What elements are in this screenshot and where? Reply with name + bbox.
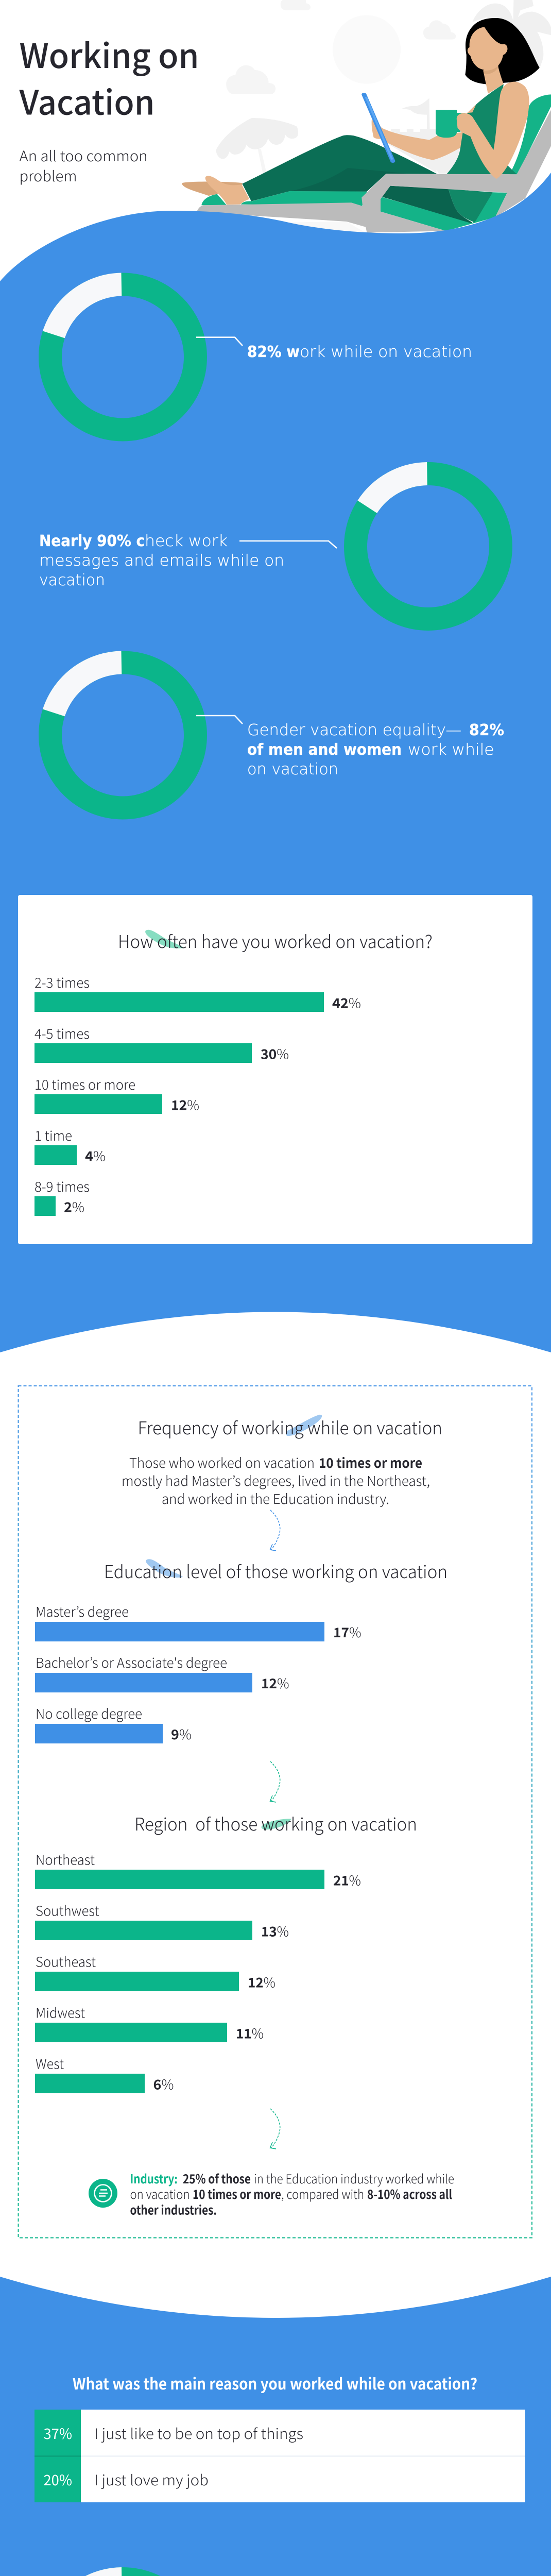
- panel: how often card: [18, 895, 532, 1244]
- illustration: sun: [333, 15, 401, 84]
- leader line: [196, 337, 243, 346]
- heading accent blob: [262, 1819, 291, 1829]
- bar: master's degree: Master’s degree: [36, 1602, 129, 1621]
- stat text: nearly 90%: [39, 532, 284, 589]
- text block: industry: 25% of those: [183, 2169, 251, 2187]
- illustration: face: [468, 27, 507, 70]
- bar: 1 time: [35, 1126, 106, 1165]
- subtitle: [20, 145, 147, 186]
- bar: 1 time: 4%: [85, 1146, 106, 1165]
- illustration: ground shade: [289, 222, 367, 233]
- bar: southeast: 12%: [248, 1972, 276, 1992]
- donut: gender equality: [31, 643, 214, 827]
- stat text: nearly 90%: vacation: [39, 571, 105, 589]
- text block: industry: [130, 2169, 454, 2218]
- donut: 82% work: [31, 265, 214, 449]
- row: 37%: I just like to be on top of things: [94, 2423, 303, 2444]
- stat text: gender equality: work while: [408, 741, 494, 759]
- panel: frequency dashed box: [19, 1386, 532, 2238]
- illustration: palm trees: [472, 0, 551, 69]
- bar: 10 times or more: [35, 1075, 199, 1114]
- row: 20%: I just love my job: [94, 2469, 209, 2490]
- bar: bachelor's or associate's degree: Bachelor’s or Associate's degree: [36, 1653, 227, 1672]
- bar: southeast: Southeast: [36, 1952, 96, 1971]
- heading: region: Region of those working on vacation: [134, 1810, 417, 1836]
- heading: main reason: What was the main reason you worked while on vacation?: [73, 2371, 477, 2394]
- illustration: top cloud: [281, 0, 311, 10]
- text block: frequency summary: Those who worked on vacation: [129, 1453, 315, 1472]
- stat text: 82%: 82% w: [247, 343, 300, 361]
- bar: no college degree: 9%: [171, 1724, 192, 1743]
- stat text: 82%: ork while on vacation: [300, 343, 472, 361]
- illustration: foot cushion: [201, 194, 227, 205]
- stat text: gender equality: Gender vacation equality—: [247, 721, 461, 739]
- illustration: hair: [465, 18, 540, 84]
- bar: no college degree: [35, 1704, 192, 1743]
- bar: southwest: 13%: [261, 1922, 289, 1940]
- bar: west: [35, 2054, 174, 2094]
- text block: industry: on vacation: [130, 2184, 190, 2202]
- heading: frequency: Frequency of working while on vacation: [138, 1414, 442, 1439]
- illustration: back arm: [372, 120, 463, 160]
- bar: 4-5 times: [35, 1024, 289, 1063]
- title: [19, 29, 199, 125]
- bar: midwest: Midwest: [36, 2003, 85, 2022]
- row: 37%: 37%: [43, 2423, 72, 2444]
- illustration: left cloud: [226, 65, 276, 94]
- row: 20%: 20%: [43, 2469, 72, 2490]
- icon: industry note: [89, 2179, 117, 2208]
- stat text: nearly 90%: heck work: [145, 532, 228, 550]
- stat text: nearly 90%: Nearly 90% c: [39, 532, 145, 550]
- bar: northeast: [35, 1850, 361, 1890]
- illustration: tablet: [364, 94, 393, 161]
- bar: 1 time: 1 time: [35, 1126, 72, 1145]
- bar: 4-5 times: 4-5 times: [35, 1024, 90, 1043]
- bar: 8-9 times: 8-9 times: [35, 1177, 90, 1196]
- stat text: gender equality: [247, 721, 504, 778]
- illustration: seat back cushion: [510, 94, 551, 174]
- text block: frequency summary: and worked in the Education industry.: [162, 1489, 389, 1508]
- text block: industry: other industries.: [130, 2200, 217, 2218]
- heading: How often have you worked on vacation?: [118, 928, 433, 953]
- arrow: [270, 1761, 280, 1802]
- bar: 2-3 times: 42%: [332, 993, 361, 1012]
- arrow: [270, 1510, 280, 1551]
- leader line: [196, 716, 243, 724]
- illustration: lower cushion: [381, 192, 507, 231]
- text block: industry: 8-10% across all: [367, 2184, 452, 2202]
- bar: master's degree: [35, 1602, 361, 1641]
- text block: industry: , compared with: [281, 2184, 364, 2202]
- donut: 66% reported: [21, 2550, 225, 2576]
- illustration: lower leg shade: [290, 168, 406, 192]
- bar: 8-9 times: [35, 1177, 90, 1216]
- bar: southeast: [35, 1952, 276, 1992]
- text block: frequency summary: mostly had Master’s degrees, lived in the Northeast,: [122, 1471, 430, 1490]
- illustration: beach umbrella: [216, 118, 298, 159]
- bar: southwest: Southwest: [36, 1901, 99, 1920]
- bar: 2-3 times: [35, 973, 361, 1012]
- title: Working on: [20, 29, 199, 78]
- illustration: front arm and hand: [457, 82, 529, 179]
- bar: northeast: 21%: [333, 1870, 361, 1890]
- bar: midwest: [35, 2003, 264, 2042]
- bar: 10 times or more: 12%: [171, 1095, 199, 1114]
- text block: industry: in the Education industry worked while: [254, 2169, 454, 2187]
- heading accent blob: [286, 1415, 322, 1436]
- illustration: dress: [446, 84, 516, 174]
- subtitle: An all too common: [20, 145, 147, 166]
- table: reasons: [35, 2410, 525, 2502]
- bar: 10 times or more: 10 times or more: [35, 1075, 135, 1094]
- illustration: umbrella pole: [258, 149, 266, 174]
- illustration: neck: [483, 63, 504, 94]
- bar: northeast: Northeast: [36, 1850, 95, 1869]
- panel: blue section one background: [0, 173, 551, 1352]
- illustration: chair frame: [197, 110, 551, 233]
- panel: blue section two background: [0, 2277, 551, 2576]
- illustration: sandcastle: [388, 98, 438, 174]
- text block: frequency summary: [122, 1453, 430, 1508]
- bar: 8-9 times: 2%: [64, 1197, 84, 1216]
- illustration: woman working on a lounge chair: [182, 0, 551, 233]
- bar: southwest: [35, 1901, 289, 1940]
- donut: nearly 90%: [328, 446, 529, 647]
- illustration: thigh: [381, 186, 472, 223]
- illustration: right cloud: [423, 20, 456, 40]
- stat text: gender equality: of men and women: [247, 741, 402, 759]
- bar: bachelor's or associate's degree: 12%: [261, 1673, 289, 1692]
- bar: master's degree: 17%: [333, 1622, 361, 1641]
- stat text: gender equality: 82%: [469, 721, 504, 739]
- arrow: [270, 2109, 280, 2149]
- row: 20%: [43, 2469, 209, 2490]
- bar: west: West: [36, 2054, 64, 2073]
- bar: 2-3 times: 2-3 times: [35, 973, 90, 992]
- illustration: front foot: [205, 176, 249, 205]
- text block: industry: 10 times or more: [193, 2184, 281, 2202]
- bar: west: 6%: [153, 2074, 174, 2094]
- illustration: back foot: [182, 181, 242, 196]
- bar: no college degree: No college degree: [36, 1704, 142, 1723]
- heading: education: Education level of those working on vacation: [104, 1558, 447, 1583]
- illustration: raised leg: [242, 135, 438, 201]
- text block: frequency summary: 10 times or more: [319, 1453, 422, 1472]
- illustration: seat cushion: [241, 191, 367, 206]
- bar: midwest: 11%: [236, 2024, 264, 2042]
- bar: bachelor's or associate's degree: [35, 1653, 289, 1692]
- stat text: nearly 90%: messages and emails while on: [39, 552, 284, 570]
- title: Vacation: [19, 76, 155, 125]
- illustration: neck shadow: [483, 65, 499, 74]
- illustration: mug: [436, 110, 465, 138]
- leader line: [239, 541, 337, 548]
- illustration: shoulder: [467, 105, 476, 113]
- subtitle: problem: [20, 165, 77, 186]
- bar: 4-5 times: 30%: [261, 1044, 289, 1063]
- stat text: gender equality: on vacation: [247, 760, 338, 778]
- heading accent blob: [146, 1559, 183, 1578]
- text block: industry: Industry:: [130, 2169, 178, 2187]
- illustration: dress lower: [449, 189, 493, 223]
- heading accent blob: [145, 930, 184, 948]
